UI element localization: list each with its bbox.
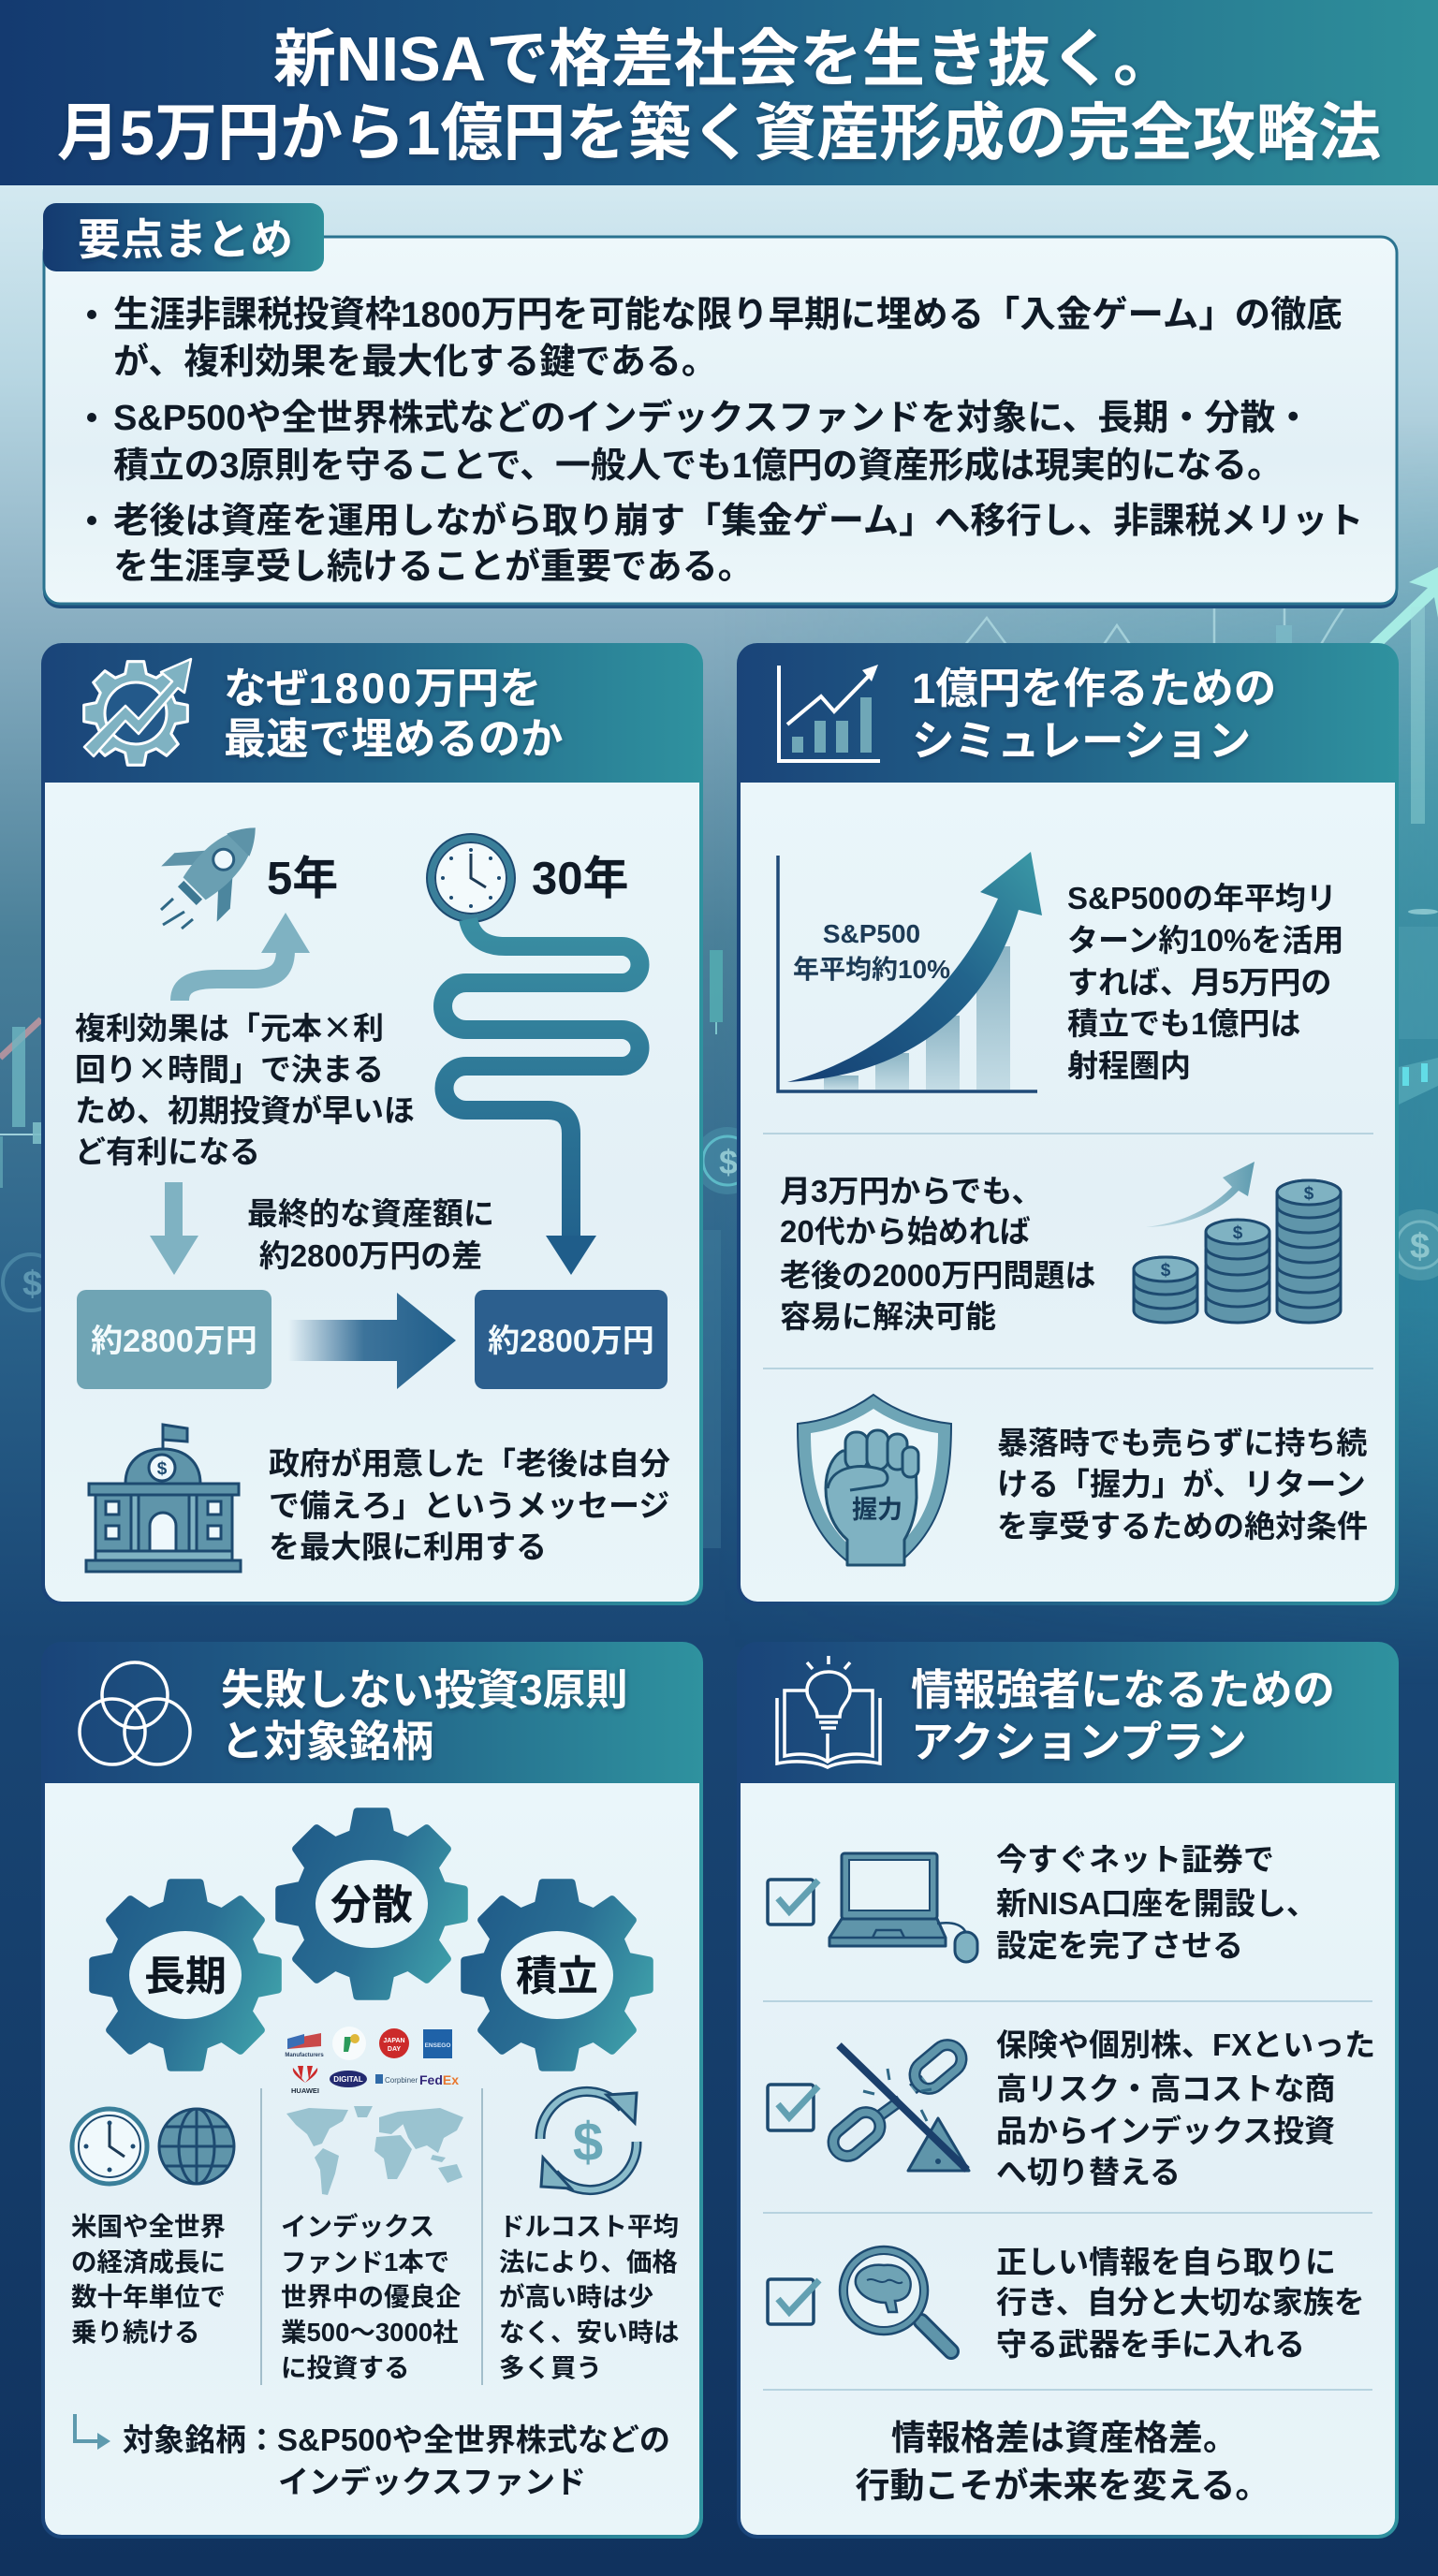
gear: accumulation: 積立 [516,1954,598,1999]
label: 5 years: 5年 [267,854,338,904]
gear: diversification [279,1811,464,1997]
background chart marks, gap under summary [964,607,1344,646]
text: open account: 新NISA口座を開設し、 [996,1886,1317,1921]
text: compound effect: 複利効果は「元本×利 [75,1003,384,1048]
panel heading [911,1666,1335,1766]
text: open account: 今すぐネット証券で [996,1842,1274,1877]
background [0,185,1438,2235]
icon: rocket [159,800,283,929]
text: accumulation: ドルコスト平均 [499,2212,679,2241]
icon: shield with fist [798,1395,951,1565]
company logos: DIGITAL [333,2075,363,2084]
text: target funds: インデックスファンド [278,2465,586,2499]
icon: shield with fist: 握力 [852,1496,902,1524]
arrow: short path up to 5 years [180,913,310,1001]
text: long term: 米国や全世界 [71,2212,226,2241]
closing message [856,2419,1269,2505]
icon: government building: $ [157,1459,168,1479]
panel: simulation [737,643,1399,1605]
text: government message: を最大限に利用する [269,1530,547,1564]
panel heading [221,1666,628,1765]
text: right information: 正しい情報を自ら取りに [996,2245,1336,2279]
text: diversification: 世界中の優良企 [281,2282,462,2311]
text: long term [71,2212,226,2347]
gear: accumulation [464,1882,650,2068]
icon: bar chart with arrow [779,665,880,761]
icon: checkbox 3 [768,2279,819,2324]
text: from 30k yen: 月3万円からでも、 [780,1174,1042,1208]
world map [286,2106,463,2195]
arrow: winding path for 30 years [443,919,640,1275]
text: accumulation: 多く買う [499,2353,602,2382]
text: compound effect: 回り×時間」で決まる [75,1045,384,1090]
company logos: FedEx [419,2072,459,2087]
gear: long term [93,1882,278,2068]
company logos [285,2027,459,2095]
text: switch to index: 品からインデックス投資 [996,2114,1335,2148]
panel heading: シミュレーション [912,717,1251,765]
icon: coin stacks: $ [1304,1184,1314,1204]
title [57,24,1381,168]
text: diversification: インデックス [281,2212,434,2241]
text: S&P500 return: 射程圏内 [1067,1048,1191,1083]
box: right amount: 約2800万円 [488,1324,654,1359]
text: right information: 守る武器を手に入れる [996,2327,1305,2362]
text: from 30k yen [780,1174,1095,1334]
arrow: left to right [288,1293,456,1389]
chart: growth curve: 年平均約10% [793,955,950,984]
icon: checkbox 2 [768,2085,818,2130]
gear: diversification: 分散 [330,1882,413,1928]
chart: growth curve [778,852,1042,1091]
icon: clock [72,2109,147,2184]
text: switch to index: へ切り替える [996,2155,1181,2189]
text: grip strength: を享受するための絶対条件 [997,1509,1368,1544]
text: diversification: ファンド1本で [281,2247,449,2276]
panel heading: 最速で埋めるのか [224,715,563,763]
panel heading [912,665,1276,765]
arrow: down to left box [150,1182,198,1275]
text: S&P500 return: ターン約10%を活用 [1067,923,1343,958]
icon: magnifier with brain [840,2247,951,2351]
text: difference [247,1196,494,1273]
text: difference: 最終的な資産額に [247,1196,494,1231]
icon: gear with arrow [84,659,191,765]
icon: clock [427,834,515,922]
summary tab heading: 要点まとめ [78,215,293,264]
summary bullets: 老後は資産を運用しながら取り崩す「集金ゲーム」へ移行し、非課税メリット [113,501,1363,541]
icon: coin stacks: $ [1233,1223,1243,1243]
company logos: DAY [388,2046,401,2053]
icon: government building [86,1425,241,1572]
panel heading [224,665,563,763]
text: right information [996,2245,1365,2362]
text: compound effect: ため、初期投資が早いほ [75,1093,415,1128]
chart: growth curve: S&P500 [823,919,920,948]
closing message: 行動こそが未来を変える。 [856,2466,1269,2505]
icon: coin stacks: $ [1161,1261,1171,1281]
text: grip strength: ける「握力」が、リターン [997,1467,1366,1501]
company logos: ENSEGO [425,2042,450,2049]
panel heading: アクションプラン [911,1719,1247,1766]
text: difference: 約2800万円の差 [259,1238,482,1273]
text: switch to index: 保険や個別株、FXといった [996,2027,1375,2062]
text: government message [269,1446,670,1564]
icon: book and lightbulb [777,1656,880,1767]
title: 新NISAで格差社会を生き抜く。 [273,24,1176,95]
text: S&P500 return [1067,881,1343,1083]
box: left amount [77,1290,271,1389]
icon: dollar cost cycle: $ [573,2112,603,2173]
text: diversification: に投資する [281,2353,410,2382]
title: 月5万円から1億円を築く資産形成の完全攻略法 [57,98,1381,168]
icon: three overlapping circles [80,1662,190,1764]
text: grip strength [997,1426,1368,1544]
text: compound effect [75,1003,415,1169]
company logos: JAPAN [383,2038,405,2044]
panel: action plan [737,1642,1399,2539]
summary bullets: 生涯非課税投資枠1800万円を可能な限り早期に埋める「入金ゲーム」の徹底 [113,295,1343,335]
panel heading: なぜ1800万円を [224,665,541,712]
text: long term: 数十年単位で [71,2282,226,2311]
text: switch to index: 高リスク・高コストな商 [996,2071,1335,2106]
text: diversification [281,2212,462,2382]
text: S&P500 return: 積立でも1億円は [1067,1006,1300,1041]
text: from 30k yen: 20代から始めれば [780,1214,1031,1249]
company logos: HUAWEI [291,2086,319,2095]
text: from 30k yen: 老後の2000万円問題は [780,1258,1095,1293]
text: diversification: 業500～3000社 [281,2318,459,2347]
icon: globe [159,2109,234,2184]
summary bullets: 積立の3原則を守ることで、一般人でも1億円の資産形成は現実的になる。 [113,446,1283,486]
summary tab heading [43,203,324,271]
icon: dollar cost cycle [540,2091,637,2190]
company logos: Corpbiner [385,2076,418,2085]
icon: broken chain with warning [828,2040,969,2171]
summary bullets: S&P500や全世界株式などのインデックスファンドを対象に、長期・分散・ [113,398,1311,438]
text: S&P500 return: S&P500の年平均リ [1067,881,1337,915]
text: compound effect: ど有利になる [75,1134,260,1169]
label: 30 years: 30年 [532,854,629,904]
text: right information: 行き、自分と大切な家族を [996,2285,1365,2320]
text: open account: 設定を完了させる [996,1928,1243,1963]
closing message: 情報格差は資産格差。 [891,2419,1238,2457]
text: accumulation: なく、安い時は [499,2318,680,2347]
summary bullets: が、複利効果を最大化する鍵である。 [113,343,717,382]
box: left amount: 約2800万円 [91,1324,257,1359]
text: accumulation: 法により、価格 [499,2247,678,2276]
text: target funds [123,2422,670,2499]
panel heading: 失敗しない投資3原則 [221,1666,628,1714]
text: accumulation [499,2212,680,2382]
panel: three principles [41,1642,703,2539]
icon: laptop and mouse [829,1853,977,1962]
gear: long term: 長期 [144,1954,227,1999]
text: open account [996,1842,1317,1963]
panel heading: と対象銘柄 [221,1718,434,1765]
background: $ [1410,1227,1430,1266]
summary bullets [87,295,1363,587]
panel heading: 1億円を作るための [912,665,1276,712]
text: government message: で備えろ」というメッセージ [269,1488,669,1523]
text: S&P500 return: すれば、月5万円の [1067,965,1331,1000]
icon: coin stacks [1134,1162,1341,1323]
arrow: target funds [75,2414,110,2450]
text: long term: 乗り続ける [71,2318,200,2347]
text: target funds: 対象銘柄：S&P500や全世界株式などの [123,2422,670,2457]
box: right amount [475,1290,668,1389]
text: accumulation: が高い時は少 [499,2282,653,2311]
text: grip strength: 暴落時でも売らずに持ち続 [997,1426,1367,1460]
summary bullets: を生涯享受し続けることが重要である。 [113,548,754,587]
background: $ [22,1265,42,1304]
company logos: Manufacturers [285,2053,324,2058]
panel: why fill 18M fast [41,643,703,1605]
panel heading: 情報強者になるための [911,1666,1335,1714]
text: long term: の経済成長に [71,2247,226,2276]
icon: checkbox 1 [768,1880,818,1925]
text: government message: 政府が用意した「老後は自分 [269,1446,670,1481]
header band [0,0,1438,185]
panel: summary [43,203,1398,608]
background: $ [719,1143,738,1181]
text: from 30k yen: 容易に解決可能 [780,1299,996,1334]
text: switch to index [996,2027,1375,2189]
